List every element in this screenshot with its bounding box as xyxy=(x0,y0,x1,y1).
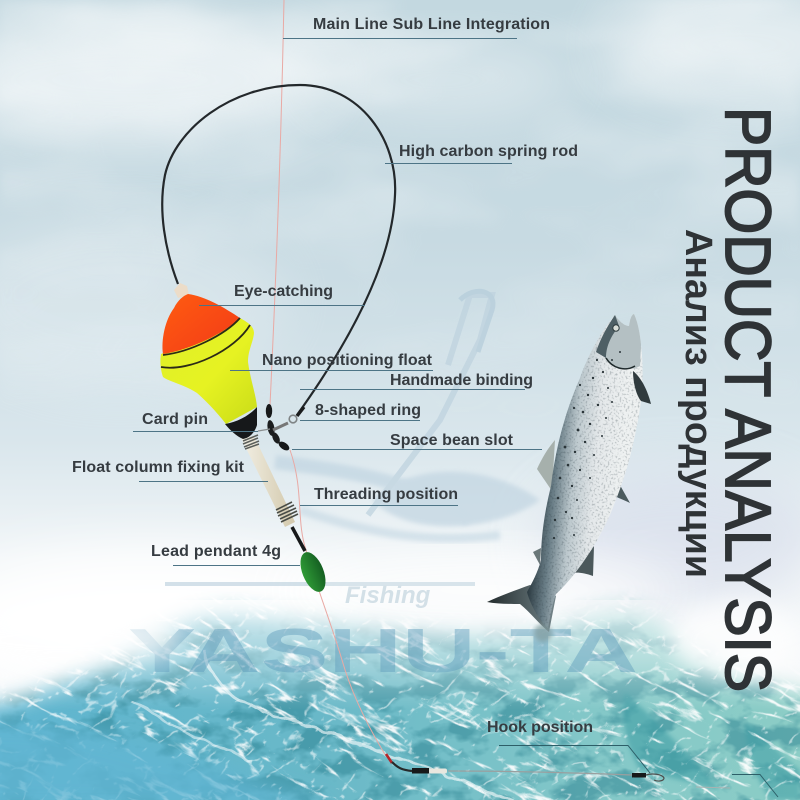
head xyxy=(604,314,641,369)
watermark logo xyxy=(165,291,540,609)
vertical title xyxy=(677,107,784,692)
hook rig xyxy=(386,754,730,788)
foam crest streak xyxy=(204,650,530,800)
spots xyxy=(553,351,621,539)
upper spring xyxy=(243,435,259,449)
yellow body xyxy=(160,318,257,424)
label: eye-catching: Eye-catching xyxy=(234,283,333,300)
label: hook position: Hook position xyxy=(487,719,593,736)
subheading: russian: Анализ продукции xyxy=(677,229,719,578)
foam haze xyxy=(0,600,800,680)
body xyxy=(527,314,643,628)
label: card pin xyxy=(133,411,258,432)
float tip xyxy=(174,283,189,298)
pectoral fin xyxy=(633,371,651,404)
label: card pin: Card pin xyxy=(142,411,208,428)
label: space bean slot: Space bean slot xyxy=(390,432,514,449)
lower spring xyxy=(276,502,298,522)
leader: second hook xyxy=(732,774,778,797)
black collar xyxy=(225,407,257,439)
label: main line: Main Line Sub Line Integration xyxy=(313,16,550,33)
calm blue wave face xyxy=(0,721,340,800)
label: binding: Handmade binding xyxy=(390,372,533,389)
splash xyxy=(534,624,552,642)
ocean waves xyxy=(0,594,800,800)
scale texture xyxy=(536,316,642,627)
label: 8-shaped ring: 8-shaped ring xyxy=(315,402,421,419)
label: lead pendant: Lead pendant 4g xyxy=(151,543,281,560)
dorsal fin xyxy=(537,440,555,491)
heading: product analysis: PRODUCT ANALYSIS xyxy=(712,107,784,692)
float assembly xyxy=(160,283,331,595)
watermark logo: Fishing xyxy=(345,582,431,609)
fishing line xyxy=(270,0,386,756)
label: nano float: Nano positioning float xyxy=(262,352,433,369)
salmon xyxy=(487,310,651,642)
lower rod xyxy=(292,527,305,551)
rear fins xyxy=(572,546,594,576)
red cap xyxy=(162,294,240,354)
label: hook position xyxy=(487,719,650,773)
column stem xyxy=(241,436,295,527)
label: float column: Float column fixing kit xyxy=(72,459,245,476)
top foam fade xyxy=(0,600,800,710)
swivel and ring xyxy=(258,404,304,452)
tail xyxy=(487,585,556,632)
watermark wordmark: YASHU-TA xyxy=(128,617,638,686)
spring rod xyxy=(162,85,395,415)
lead pendant xyxy=(295,549,331,595)
wave peaks xyxy=(623,692,720,790)
label: threading: Threading position xyxy=(314,486,458,503)
label: spring rod: High carbon spring rod xyxy=(399,143,578,160)
